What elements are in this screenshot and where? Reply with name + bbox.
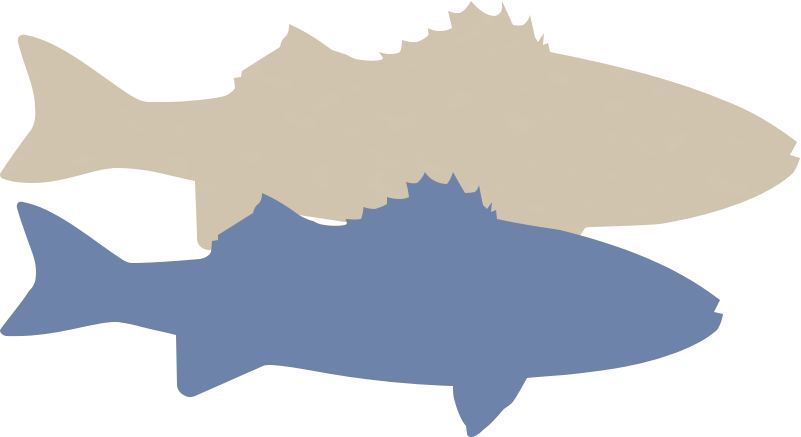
fish: tan textured silhouette [0, 0, 801, 260]
fish: blue silhouette [0, 172, 723, 437]
